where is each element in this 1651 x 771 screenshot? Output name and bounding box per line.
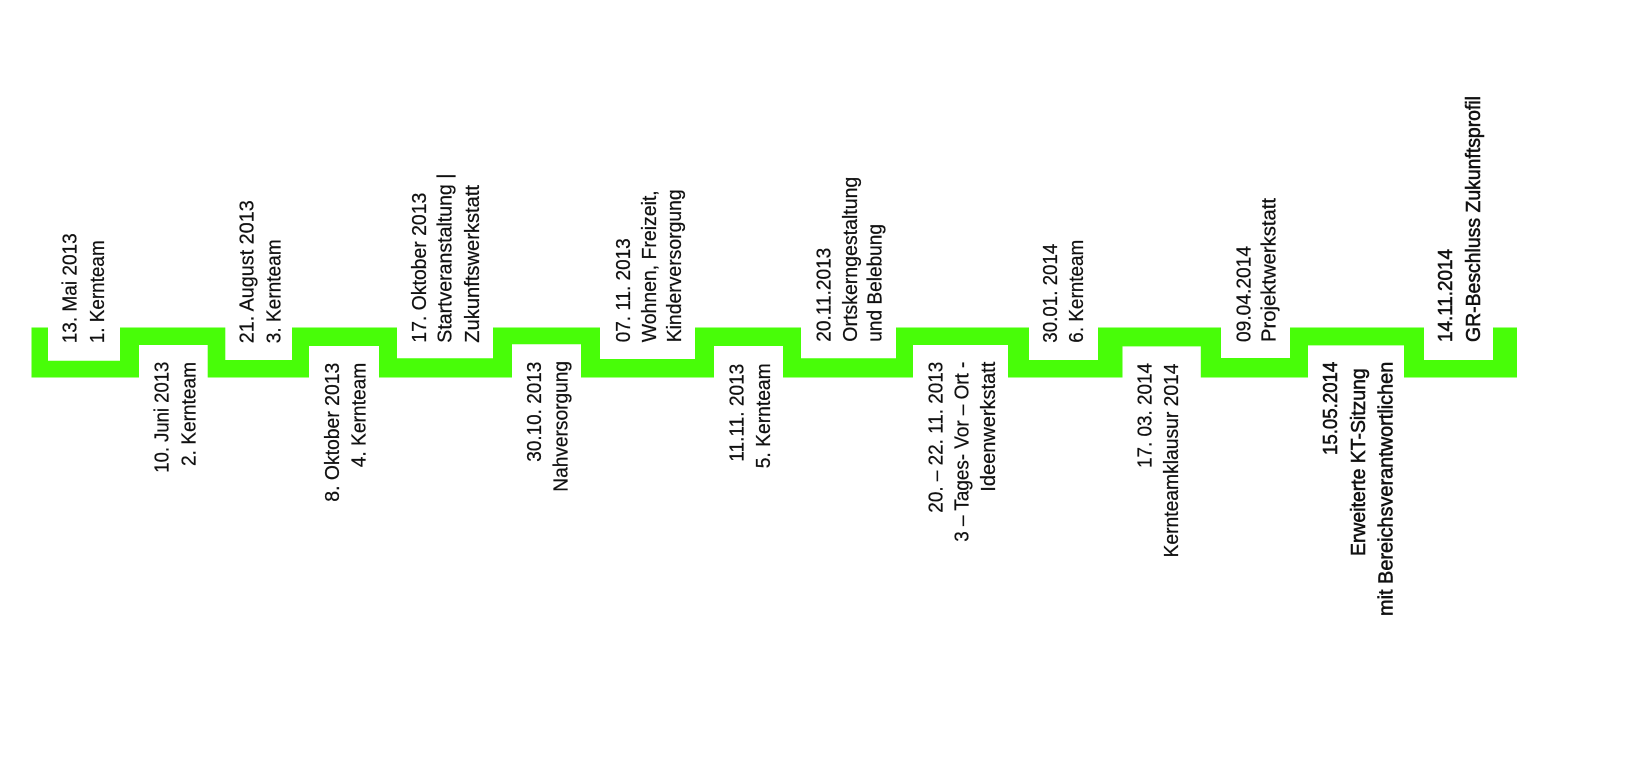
milestone: 07. 11. 2013: Wohnen, Freizeit, bbox=[639, 190, 661, 342]
milestone: 09.04.2014: 09.04.2014 bbox=[1233, 246, 1255, 342]
milestone: 8. Oktober 2013: 8. Oktober 2013 bbox=[322, 363, 344, 502]
milestone: 15.05.2014: mit Bereichsverantwortlichen bbox=[1375, 362, 1397, 616]
milestone: 17. Oktober 2013 bbox=[409, 174, 484, 343]
milestone: 13. Mai 2013: 13. Mai 2013 bbox=[60, 233, 82, 343]
milestone: 30.10. 2013 bbox=[524, 361, 572, 492]
milestone: 30.10. 2013: 30.10. 2013 bbox=[524, 362, 546, 462]
milestone: 30.01. 2014: 6. Kernteam bbox=[1066, 240, 1088, 343]
milestone: 09.04.2014: Projektwerkstatt bbox=[1259, 198, 1281, 342]
milestone: 15.05.2014: Erweiterte KT-Sitzung bbox=[1348, 368, 1370, 556]
milestone: 20. – 22. 11. 2013: 20. – 22. 11. 2013 bbox=[926, 362, 948, 513]
milestone: 30.01. 2014: 30.01. 2014 bbox=[1040, 244, 1062, 343]
milestone: 17. 03. 2014: 17. 03. 2014 bbox=[1135, 363, 1157, 468]
milestone: 21. August 2013: 3. Kernteam bbox=[264, 239, 286, 343]
milestone: 8. Oktober 2013: 4. Kernteam bbox=[348, 363, 370, 467]
milestone: 21. August 2013: 21. August 2013 bbox=[237, 200, 259, 343]
milestone: 17. Oktober 2013: 17. Oktober 2013 bbox=[409, 193, 431, 343]
milestone: 20. – 22. 11. 2013 bbox=[926, 361, 1000, 542]
milestone: 17. 03. 2014: Kernteamklausur 2014 bbox=[1161, 364, 1183, 558]
milestone: 17. Oktober 2013: Zukunftswerkstatt bbox=[462, 185, 484, 343]
milestone: 07. 11. 2013: 07. 11. 2013 bbox=[613, 238, 635, 342]
milestone: 8. Oktober 2013 bbox=[322, 363, 370, 502]
milestone: 20. – 22. 11. 2013: Ideenwerkstatt bbox=[978, 361, 1000, 492]
milestone: 11.11. 2013: 11.11. 2013 bbox=[727, 364, 749, 462]
milestone: 07. 11. 2013: Kinderversorgung bbox=[664, 189, 686, 342]
milestone: 10. Juni 2013 bbox=[151, 362, 200, 473]
milestone: 14.11.2014: 14.11.2014 bbox=[1435, 249, 1457, 342]
milestone: 15.05.2014 bbox=[1320, 362, 1397, 616]
milestone: 13. Mai 2013 bbox=[60, 233, 109, 343]
milestone: 20.11.2013: 20.11.2013 bbox=[814, 248, 836, 342]
milestone: 20.11.2013: und Belebung bbox=[864, 224, 886, 342]
milestone: 07. 11. 2013 bbox=[613, 189, 686, 342]
milestone: 10. Juni 2013: 10. Juni 2013 bbox=[151, 362, 173, 473]
milestone: 17. 03. 2014 bbox=[1135, 363, 1183, 558]
milestone: 17. Oktober 2013: Startveranstaltung | bbox=[435, 174, 457, 343]
milestone: 30.01. 2014 bbox=[1040, 240, 1088, 343]
milestone: 14.11.2014 bbox=[1435, 96, 1485, 342]
milestone: 30.10. 2013: Nahversorgung bbox=[550, 361, 572, 492]
milestone: 21. August 2013 bbox=[237, 200, 286, 343]
milestone: 20.11.2013: Ortskerngestaltung bbox=[840, 177, 862, 342]
milestone: 10. Juni 2013: 2. Kernteam bbox=[178, 362, 200, 466]
milestone: 15.05.2014: 15.05.2014 bbox=[1320, 362, 1342, 455]
milestone: 20. – 22. 11. 2013: 3 – Tages- Vor – Ort - bbox=[951, 362, 973, 542]
milestone: 13. Mai 2013: 1. Kernteam bbox=[87, 240, 109, 343]
milestone: 14.11.2014: GR-Beschluss Zukunftsprofil bbox=[1463, 96, 1485, 342]
milestone: 20.11.2013 bbox=[814, 177, 886, 342]
milestone: 11.11. 2013 bbox=[727, 363, 775, 468]
milestone: 11.11. 2013: 5. Kernteam bbox=[753, 363, 775, 468]
green stepped timeline band bbox=[32, 328, 1517, 378]
milestone: 09.04.2014 bbox=[1233, 198, 1281, 342]
